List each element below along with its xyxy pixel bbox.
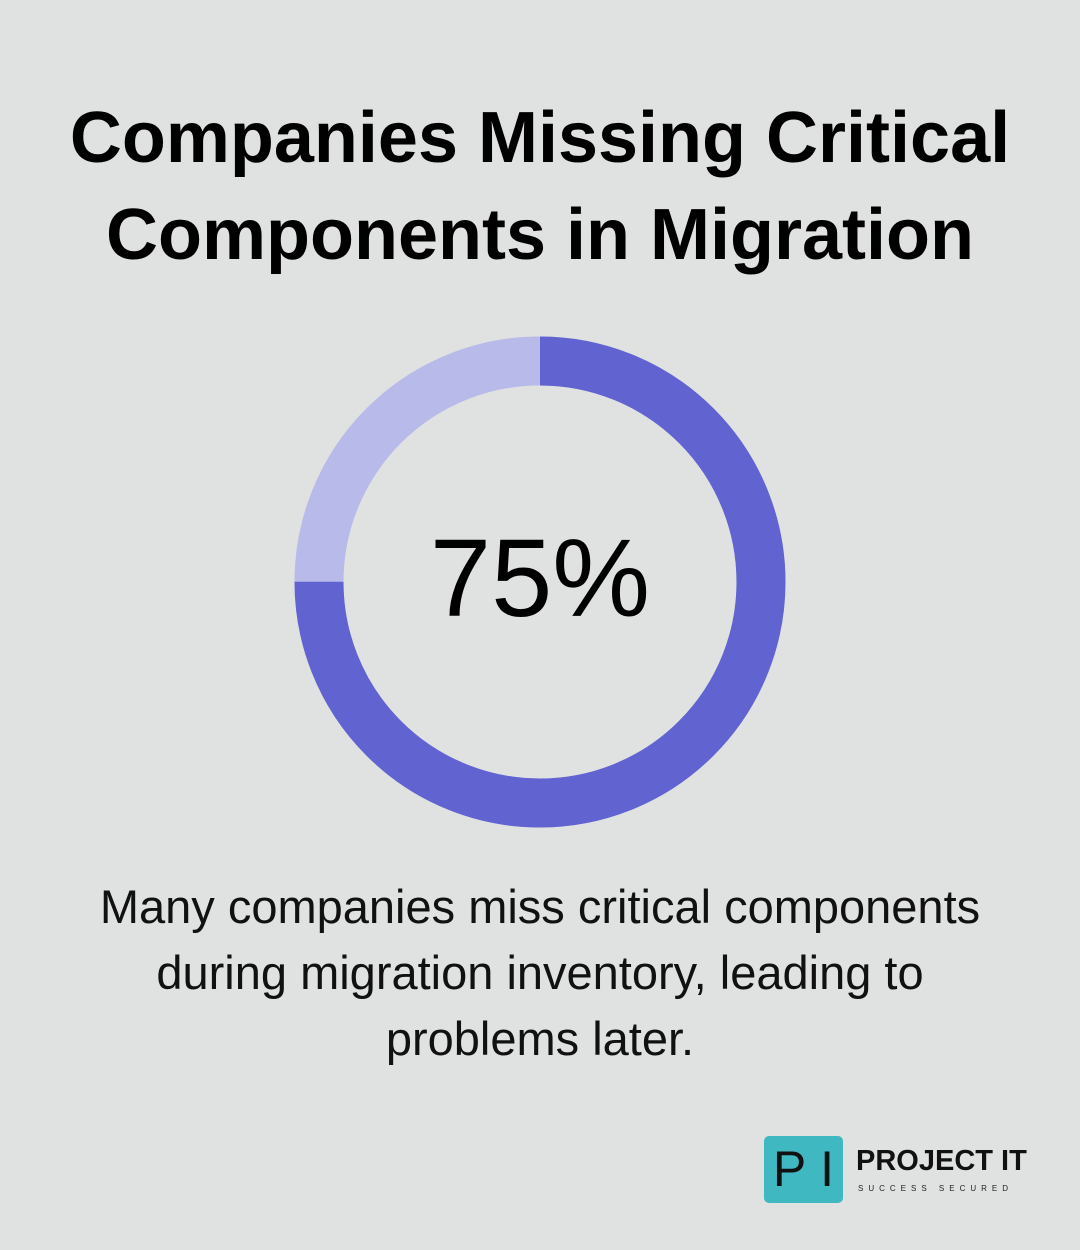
description text: problems later. <box>386 1012 694 1065</box>
description text: during migration inventory, leading to <box>156 946 924 999</box>
donut chart: 75% <box>430 517 650 640</box>
title: Components in Migration <box>106 195 974 275</box>
title: Companies Missing Critical <box>70 98 1010 178</box>
logo: PROJECT IT <box>856 1145 1027 1177</box>
description text <box>100 880 980 1065</box>
logo <box>764 1136 1027 1203</box>
title <box>70 98 1010 275</box>
description text: Many companies miss critical components <box>100 880 980 933</box>
logo: SUCCESS SECURED <box>858 1184 1013 1193</box>
logo: P I <box>773 1141 834 1197</box>
